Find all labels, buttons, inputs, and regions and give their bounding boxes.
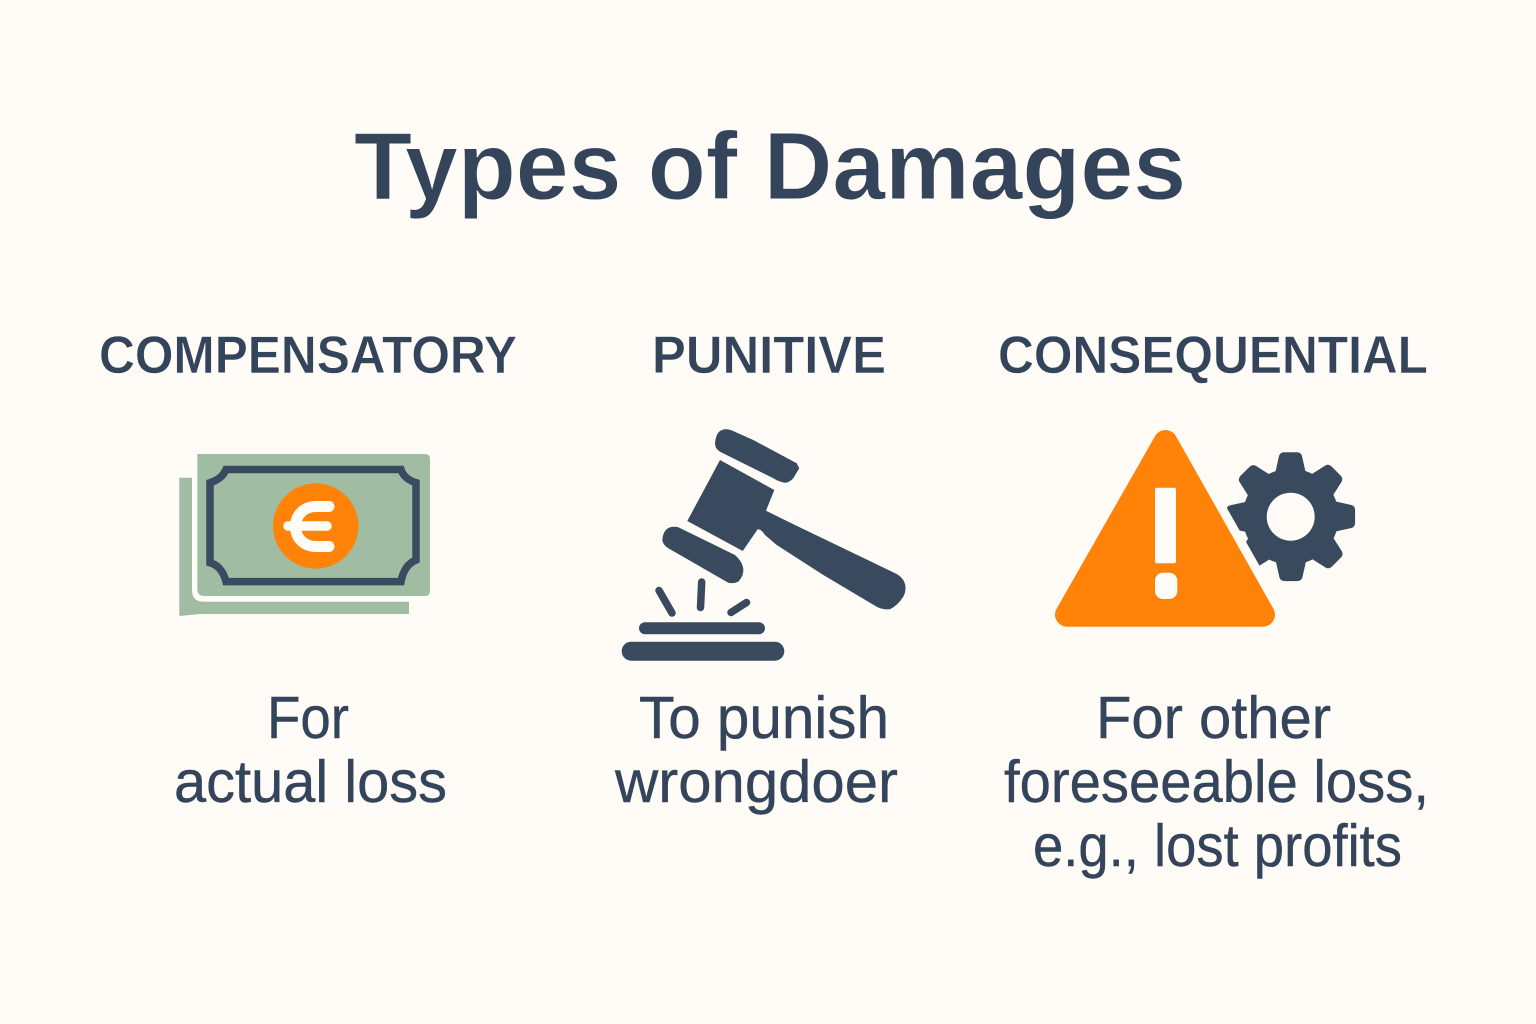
heading: punitive: PUNITIVE [652, 326, 886, 385]
panel: punitive [614, 326, 906, 815]
description: punitive: To punish [639, 685, 889, 751]
description: compensatory: actual loss [174, 749, 447, 815]
description: consequential [1004, 685, 1429, 879]
heading: compensatory: COMPENSATORY [99, 326, 517, 385]
description: compensatory: For [267, 685, 349, 751]
icon: gavel [622, 429, 906, 661]
description: consequential: foreseeable loss, [1004, 749, 1429, 815]
heading: consequential: CONSEQUENTIAL [998, 326, 1428, 385]
icon: warning triangle and gear [1067, 442, 1355, 615]
description: punitive: wrongdoer [614, 749, 898, 815]
panel: compensatory [99, 326, 517, 815]
description: consequential: e.g., lost profits [1033, 813, 1402, 879]
title: Types of Damages [354, 113, 1186, 220]
panel: consequential [998, 326, 1429, 879]
icon: euro banknotes [179, 454, 430, 616]
description: compensatory [174, 685, 447, 815]
description: punitive [614, 685, 898, 815]
description: consequential: For other [1096, 685, 1331, 751]
